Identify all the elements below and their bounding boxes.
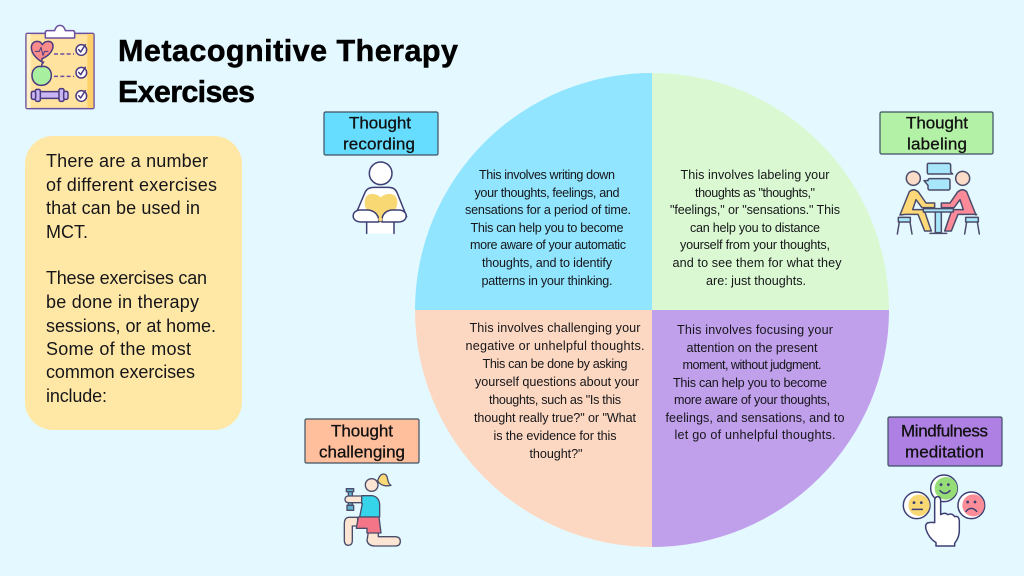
icon: clipboard checklist [26,25,94,109]
quadrant: mindfulness meditation: attention on the present [686,341,818,355]
label: thought labeling [880,112,993,154]
label: thought labeling: labeling [907,134,967,154]
quadrant: thought recording [415,73,652,310]
quadrant: thought challenging: This involves challenging your [470,321,640,335]
label: thought recording: Thought [349,114,411,132]
quadrant: thought challenging [415,310,652,547]
quadrant: thought labeling: and to see them for what they [672,256,842,270]
quadrant: thought labeling: thoughts as "thoughts," [695,186,815,200]
label: mindfulness meditation [888,417,1002,466]
quadrant: thought labeling: are: just thoughts. [706,274,806,288]
label: thought challenging [305,419,419,463]
quadrant: thought challenging: yourself questions about your [475,375,639,389]
icon: hand selecting mood faces [903,475,985,546]
quadrant: thought labeling: This involves labeling your [680,168,830,182]
label: mindfulness meditation: Mindfulness [901,422,988,440]
quadrant: thought challenging: thoughts, such as "Is this [489,393,621,407]
panel: introduction: of different exercises [46,175,217,195]
panel: introduction: sessions, or at home. [46,316,216,336]
title [118,34,458,109]
panel: introduction [25,136,242,430]
label: thought recording: recording [343,134,415,154]
label: thought challenging: challenging [319,442,405,462]
panel: introduction: There are a number [46,151,208,171]
quadrant: thought challenging: thought really true?" or "What [474,411,636,425]
quadrant: thought labeling: yourself from your thoughts, [680,238,830,252]
quadrant: mindfulness meditation [652,310,889,547]
panel: introduction: common exercises [46,362,195,382]
panel: introduction: include: [46,386,107,406]
icon: two people talking at table [897,163,979,234]
quadrant: thought challenging: negative or unhelpful thoughts. [466,339,644,353]
quadrant: thought recording: This involves writing down [479,168,615,182]
quadrant: thought recording: sensations for a period of time. [465,203,631,217]
panel: quadrant circle [415,73,889,547]
panel: introduction: that can be used in [46,198,200,218]
quadrant: mindfulness meditation: This involves focusing your [677,323,833,337]
quadrant: thought labeling: "feelings," or "sensations." This [670,203,840,217]
quadrant: thought recording: This can help you to become [470,221,624,235]
quadrant: thought recording: thoughts, and to identify [482,256,613,270]
title: Metacognitive Therapy [118,34,458,68]
quadrant: mindfulness meditation: This can help you to become [673,376,827,390]
title: Exercises [118,75,255,109]
panel: introduction: MCT. [46,222,88,242]
label: thought recording [324,112,438,155]
quadrant: mindfulness meditation: let go of unhelpful thoughts. [674,428,836,442]
label: thought challenging: Thought [331,422,393,440]
quadrant: thought recording: patterns in your thinking. [482,274,612,288]
quadrant: thought recording: more aware of your automatic [470,238,626,252]
quadrant: thought challenging: is the evidence for this [494,429,616,443]
panel: introduction: These exercises can [46,268,207,288]
quadrant: thought labeling: can help you to distance [690,221,820,235]
quadrant: mindfulness meditation: moment, without judgment. [682,358,822,372]
quadrant: thought challenging: This can be done by asking [482,357,628,371]
panel: introduction: Some of the most [46,339,191,359]
label: mindfulness meditation: meditation [905,442,984,462]
quadrant: mindfulness meditation: more aware of your thoughts, [674,393,830,407]
quadrant: thought recording: your thoughts, feelings, and [474,186,620,200]
icon: woman lunging with dumbbell [344,474,400,546]
label: thought labeling: Thought [906,114,968,132]
panel: introduction: be done in therapy [46,292,199,312]
icon: person hugging heart [353,162,407,233]
quadrant: thought labeling [652,73,889,310]
quadrant: thought challenging: thought?" [530,447,582,461]
quadrant: mindfulness meditation: feelings, and sensations, and to [666,411,844,425]
